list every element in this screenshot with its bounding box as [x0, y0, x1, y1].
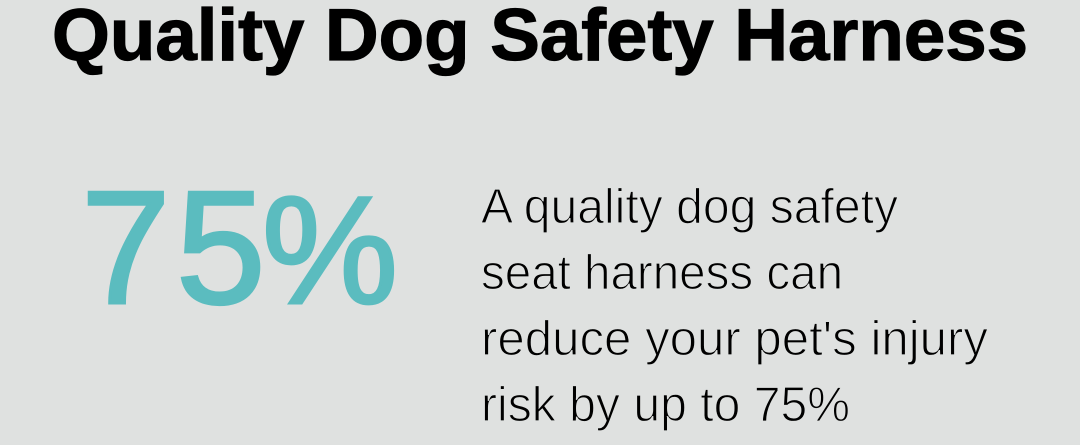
description text: reduce your pet's injury [481, 312, 988, 366]
statistic: 75%: % [262, 165, 398, 336]
statistic: 75%: 5 [176, 158, 266, 338]
statistic: 75%: 7 [81, 158, 171, 338]
description text: seat harness can [481, 246, 843, 300]
description text: risk by up to 75% [481, 378, 850, 432]
description text [481, 180, 988, 432]
description text: A quality dog safety [481, 180, 898, 234]
